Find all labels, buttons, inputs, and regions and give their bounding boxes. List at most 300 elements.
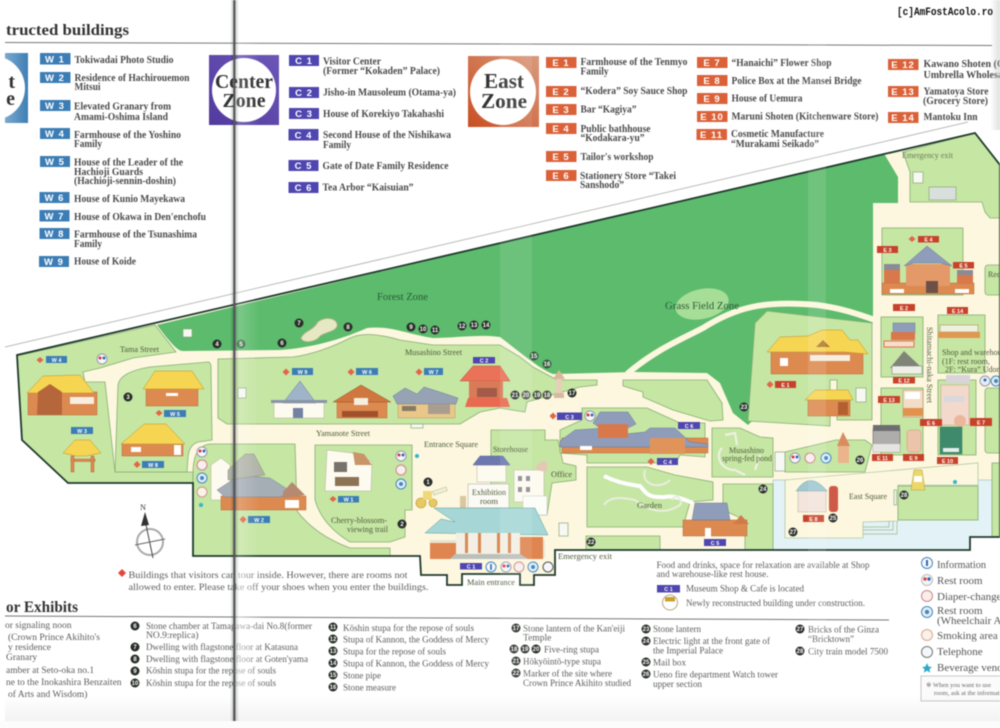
info note box: ※ When you want to use — [926, 682, 991, 689]
block: east lawn — [898, 486, 978, 520]
building: E1 farmhouse — [767, 330, 868, 374]
label Musashino spring-fed pond: Musashino — [729, 446, 764, 455]
E1: Family — [580, 66, 608, 78]
exhibit list column 5: upper section — [653, 680, 702, 690]
E4: E 4 — [552, 124, 570, 135]
building: C2 mausoleum — [460, 366, 510, 407]
W3: Amami-Oshima Island — [74, 112, 168, 123]
note: visit inside buildings: Buildings that visitors can tour inside. However, there are rooms not — [128, 571, 408, 581]
E7: E 7 — [703, 58, 721, 69]
exhibit list column 4: 21 — [513, 659, 520, 665]
block: W5 and W8 — [115, 362, 212, 472]
badge W6: W 6 — [362, 370, 372, 376]
header rule — [5, 42, 992, 46]
C4 — [288, 129, 451, 151]
E8: E 8 — [703, 76, 721, 87]
numbered exhibit markers: 12 — [459, 324, 466, 330]
key: museum shop and cafe: C 1 — [664, 587, 673, 593]
compass: N — [140, 503, 146, 512]
badge W4: W 4 — [52, 358, 62, 364]
exhibit list column 4: Crown Prince Akihito studied — [523, 679, 631, 689]
E11: E 11 — [700, 130, 723, 141]
label Exhibition room: room — [480, 497, 499, 506]
note: visit inside buildings: allowed to enter. Please take off your shoes when you enter the buildings. — [128, 582, 428, 593]
heading: reconstructed buildings: tructed buildings — [6, 22, 129, 39]
E14: Mantoku Inn — [924, 112, 978, 123]
small white structures — [183, 172, 956, 536]
badge E9 — [903, 454, 924, 462]
C1: (Former “Kokaden” Palace) — [323, 66, 440, 77]
exhibit list column 2: 10 — [132, 681, 139, 687]
exhibit: lamp post — [911, 470, 925, 490]
numbered exhibit markers: 4 — [215, 342, 219, 348]
label Cherry-blossom viewing trail: viewing trail — [347, 525, 389, 534]
exhibit list column 3: 15 — [330, 673, 337, 679]
badge E10 — [937, 457, 958, 465]
C5: Gate of Date Family Residence — [322, 161, 449, 172]
W6: House of Kunio Mayekawa — [74, 194, 185, 205]
label Shibamachi-naka Street: Shitamachi-naka Street — [925, 327, 934, 404]
badge W7: W 7 — [429, 370, 438, 376]
badge E6: E 6 — [927, 421, 935, 427]
block: E7 — [938, 380, 976, 455]
badge E13 — [878, 396, 900, 404]
building: police box E8 — [796, 480, 838, 512]
block: Musashino Street — [218, 334, 597, 424]
exhibit list column 5: Ueno fire department Watch tower — [653, 670, 779, 680]
building: W3 granary — [63, 440, 101, 472]
road branch through forest — [627, 304, 875, 374]
exhibit list column 1 — [5, 621, 122, 700]
telephone: Telephone — [937, 646, 983, 658]
C4: Family — [323, 140, 351, 151]
label Garden: Garden — [637, 501, 662, 510]
moat water — [773, 480, 1000, 552]
numbered exhibit markers: 23 — [741, 405, 748, 411]
numbered exhibit markers: 27 — [790, 530, 797, 536]
badge C5: C 5 — [711, 541, 719, 547]
stepping stone feature — [301, 319, 337, 342]
block: garden — [587, 467, 713, 527]
building: W2 residence — [211, 454, 306, 510]
numbered exhibit markers: 5 — [239, 342, 243, 348]
wheelchair rest room: Rest room — [937, 605, 983, 617]
label emergency exit bottom: Emergency exit — [558, 552, 613, 561]
label main entrance: Main entrance — [467, 578, 515, 587]
exhibit list column 5 — [642, 624, 779, 690]
exhibit list column 3: 14 — [330, 661, 337, 667]
C3: C 3 — [295, 109, 313, 120]
E3: E 3 — [552, 105, 570, 116]
key: museum shop and cafe: Museum Shop & Cafe is located — [686, 584, 804, 594]
heading: major exhibits: or Exhibits — [6, 599, 78, 616]
numbered exhibit markers: 20 — [523, 393, 530, 399]
thin boundary line above map — [5, 122, 968, 347]
map badges: east zone — [766, 236, 992, 523]
exhibit list column 6: City train model 7500 — [808, 648, 888, 658]
numbered exhibit markers: 3 — [126, 395, 130, 401]
badge W3 — [71, 427, 93, 435]
W5 — [40, 156, 184, 187]
W6 — [40, 192, 185, 205]
badge C4: C 4 — [663, 460, 673, 466]
building: W4 farmhouse — [27, 375, 97, 415]
block: E2 — [881, 317, 923, 377]
badge C5 — [704, 539, 726, 547]
zone badge: East Zone: Zone — [481, 89, 527, 113]
compass — [135, 503, 165, 558]
badge E3: E 3 — [883, 248, 892, 254]
block: W2 — [193, 444, 390, 556]
E4: Public bathhouse — [580, 124, 651, 135]
badge E4: E 4 — [924, 238, 934, 244]
badge W5: W 5 — [170, 412, 180, 418]
W8: Farmhouse of the Tsunashima — [74, 230, 197, 240]
building: E13 — [903, 390, 923, 417]
block: south east of garden — [723, 484, 773, 550]
zone badge: Center Zone — [209, 55, 279, 125]
W3: W 3 — [45, 101, 65, 112]
badge W1: W 1 — [344, 498, 353, 504]
numbered exhibit markers: 2 — [400, 522, 404, 528]
badge W9: W 9 — [298, 370, 307, 376]
grass field patch — [675, 288, 729, 320]
east square ground — [785, 463, 978, 538]
building: warehouse shop E6 — [941, 375, 970, 427]
badge W2 — [240, 516, 270, 524]
badge E5 — [953, 262, 974, 270]
food and drink note: and warehouse-like rest house. — [656, 570, 768, 580]
exhibit list column 5: 25 — [643, 660, 650, 666]
exhibit list column 3: 11 — [330, 625, 337, 631]
C4: C 4 — [295, 130, 312, 142]
wheelchair rest room — [922, 605, 1000, 627]
badge C3: C 3 — [565, 415, 574, 421]
exhibit list column 5: 24 — [643, 639, 650, 645]
exhibit list column 4 — [510, 624, 631, 689]
building: E4 bathhouse with E3 and E5 — [882, 246, 974, 294]
building: E12 — [890, 351, 922, 374]
exhibit list column 1: of Arts and Wisdom) — [8, 689, 87, 700]
E10: E 10 — [700, 112, 724, 123]
zone badge: East Zone — [468, 56, 539, 127]
block: W1 — [315, 445, 412, 542]
badge E1: E 1 — [781, 383, 790, 389]
exhibit list column 4: 17 — [513, 626, 520, 632]
W5: Hachioji Guards — [74, 167, 143, 178]
badge E1 — [766, 381, 796, 389]
W4 — [40, 128, 181, 150]
E5: E 5 — [552, 152, 570, 163]
building: exhibition room — [460, 484, 509, 508]
exhibit list column 4: Five-ring stupa — [544, 646, 600, 656]
E13: Yamatoya Store — [924, 86, 989, 98]
exhibit list column 1: y residence — [8, 643, 51, 653]
exhibit list column 3: 12 — [330, 637, 337, 643]
building: office — [514, 461, 547, 515]
label Entrance Square: Entrance Square — [424, 440, 478, 449]
label Tama Street: Tama Street — [120, 345, 160, 354]
building: E2 — [884, 323, 915, 347]
exhibit list column 3: Stupa of Kannon, the Goddess of Mercy — [343, 634, 489, 646]
building: W8 farmhouse — [121, 424, 185, 456]
exhibit list column 6: 28 — [797, 649, 804, 655]
block: storehouse and office — [491, 430, 576, 515]
label Exhibition room — [472, 488, 506, 506]
E9 — [697, 93, 802, 105]
zone badge: West Zone: t — [8, 71, 15, 93]
E6: Sanshodo” — [580, 180, 624, 191]
facilities legend — [922, 558, 1000, 674]
stair lines — [863, 521, 897, 534]
badge E12: E 12 — [898, 378, 910, 384]
exhibit list column 2: 8 — [133, 657, 137, 663]
building: E10 — [940, 427, 962, 454]
legend: east zone buildings — [546, 57, 1000, 191]
badge C1 — [460, 563, 482, 570]
information: Information — [937, 559, 986, 571]
exhibit list column 3 — [328, 622, 489, 694]
numbered exhibit markers: 22 — [588, 540, 595, 546]
exhibit list column 6 — [796, 624, 888, 658]
W2: Mitsui — [74, 82, 101, 93]
block: E13 and E9 — [881, 388, 923, 455]
building: E14 — [938, 325, 980, 338]
block: emergency exit lawn — [903, 133, 1000, 218]
W7 — [40, 210, 206, 223]
C1: C 1 — [295, 56, 313, 67]
food and drink note — [656, 560, 870, 580]
zone badge: Center Zone: Zone — [222, 90, 266, 112]
legend: center zone buildings — [288, 55, 456, 194]
badge E14: E 14 — [952, 309, 964, 315]
W3: Elevated Granary from — [74, 102, 172, 112]
exhibit: steam roller — [416, 487, 447, 508]
W8: Family — [74, 239, 102, 250]
exhibit list column 4: 20 — [533, 647, 540, 653]
exhibit list column 5: Stone lantern — [653, 625, 701, 635]
garden blocks — [17, 133, 1000, 556]
numbered exhibit markers: 26 — [857, 458, 864, 464]
garden pond — [604, 476, 693, 503]
W4: Farmhouse of the Yoshino — [74, 130, 181, 141]
exhibit list column 3: 16 — [330, 685, 337, 691]
E9: E 9 — [703, 94, 721, 105]
badge E7 — [970, 418, 992, 426]
badge E12 — [893, 377, 915, 384]
exhibit list column 1: (Crown Prince Akihito's — [8, 632, 100, 643]
building: W5 house — [143, 371, 204, 406]
W9 — [39, 256, 137, 268]
W6: W 6 — [45, 193, 64, 204]
label Yamanote Street: Yamanote Street — [316, 429, 371, 438]
exhibit list column 2: Stone chamber at Tamagawa-dai No.8(former — [146, 621, 313, 632]
numbered exhibit markers: 10 — [420, 327, 427, 333]
label shop and warehouse: (1F: rest room, — [942, 357, 990, 366]
badge E14 — [947, 307, 968, 315]
numbered exhibit markers: 7 — [297, 321, 301, 327]
badge E2: E 2 — [900, 306, 908, 312]
W2 — [40, 72, 190, 93]
exhibit list column 5: Mail box — [653, 658, 686, 668]
E13: E 13 — [891, 87, 915, 98]
W8: W 8 — [45, 229, 64, 240]
building: W9 house — [271, 381, 327, 418]
exhibit list column 6: 27 — [797, 627, 804, 633]
C2: Jisho-in Mausoleum (Otama-ya) — [323, 88, 456, 98]
E5 — [546, 151, 654, 163]
badge E6 — [920, 419, 942, 427]
exhibit list column 2: Kōshin stupa for the repose of souls — [146, 666, 276, 676]
badge W5 — [156, 410, 186, 418]
exhibit list column 4: 22 — [513, 671, 520, 677]
exhibit list column 3: Kōshin stupa for the repose of souls — [343, 623, 474, 634]
exhibit list column 1: ne to the Inokashira Benzaiten — [6, 678, 122, 688]
exhibit list column 4: 19 — [522, 647, 529, 653]
badge E4 — [908, 236, 939, 244]
zone badge: West Zone: e — [6, 88, 15, 110]
label Storehouse: Storehouse — [493, 445, 528, 454]
stone lantern — [553, 370, 565, 398]
label Musashino Street: Musashino Street — [405, 348, 463, 357]
badge C2: C 2 — [480, 358, 488, 364]
building: exhibition storehouse — [473, 456, 510, 482]
key: reconstruction icon — [662, 595, 865, 610]
note: visit inside buildings — [118, 569, 428, 593]
map badges: center zone — [460, 357, 726, 570]
spring pond paths — [719, 433, 760, 475]
building: W1 photo studio — [325, 450, 372, 491]
badge W7 — [416, 368, 443, 376]
block: E4 — [882, 228, 963, 295]
E14 — [888, 112, 978, 124]
E2: “Kodera” Soy Sauce Shop — [580, 86, 688, 97]
food and drink note: Food and drinks, space for relaxation are available at Shop — [656, 560, 870, 571]
label shop and warehouse: 2F: “Kura” Udon — [945, 365, 1000, 374]
exhibit list column 1: Granary — [6, 653, 37, 663]
badge W9 — [282, 368, 313, 376]
C2: C 2 — [295, 88, 313, 99]
E3 — [546, 104, 636, 116]
badge W3: W 3 — [77, 429, 87, 435]
E2 — [546, 86, 688, 98]
numbered exhibit markers: 28 — [901, 493, 908, 499]
rest room: Rest room — [937, 575, 983, 587]
block: south of C5 west — [586, 536, 660, 550]
exhibit list column 3: Stone measure — [343, 684, 396, 694]
badge C2 — [473, 357, 495, 364]
E13 — [888, 86, 989, 107]
exhibit list column 3: Stupa of Kannon, the Goddess of Mercy — [343, 658, 489, 670]
building: C4 Nishikawa house — [560, 412, 708, 454]
numbered exhibit markers: 15 — [531, 354, 538, 360]
W1: Tokiwadai Photo Studio — [74, 55, 174, 66]
block: recreation — [985, 265, 1000, 295]
numbered exhibit markers: 1 — [426, 480, 430, 486]
block: tower lawn — [785, 440, 872, 472]
exhibit list column 3: Stupa for the repose of souls — [343, 646, 446, 658]
W5: House of the Leader of the — [74, 158, 184, 168]
badge W4 — [36, 356, 67, 364]
label Musashino spring-fed pond — [722, 446, 772, 463]
badge W6 — [348, 368, 378, 376]
exhibit list column 6: Bricks of the Ginza — [808, 624, 880, 636]
badge E8 — [803, 515, 824, 523]
label Cherry-blossom viewing trail — [331, 516, 389, 534]
map badges: west zone — [36, 356, 443, 524]
E9: House of Uemura — [732, 94, 802, 104]
E13: (Grocery Store) — [923, 96, 988, 107]
E11: Cosmetic Manufacture — [731, 129, 825, 140]
W9: W 9 — [44, 257, 64, 268]
badge E11 — [872, 454, 893, 462]
badge C6 — [678, 422, 700, 430]
building: E1 outbuilding — [805, 390, 853, 416]
badge E13: E 13 — [883, 398, 895, 404]
numbered exhibit markers: 17 — [569, 391, 576, 397]
W9: House of Koide — [74, 256, 137, 268]
numbered exhibit markers: 14 — [483, 323, 490, 329]
info note box — [921, 676, 1000, 701]
exhibit list column 6: “Bricktown” — [808, 635, 854, 645]
exhibit list column 3: Stone pipe — [343, 672, 381, 682]
exhibit list column 1: or signaling noon — [5, 621, 72, 631]
W3 — [40, 100, 172, 123]
C3: House of Korekiyo Takahashi — [323, 109, 444, 120]
E12 — [888, 59, 1000, 81]
badge E10: E 10 — [942, 459, 953, 465]
block: Tama Street west — [17, 325, 193, 483]
E12: E 12 — [891, 60, 915, 71]
label Grass Field Zone: Grass Field Zone — [665, 301, 740, 312]
badge W8 — [134, 461, 164, 469]
label Cherry-blossom viewing trail: Cherry-blossom- — [331, 516, 387, 525]
label Exhibition room: Exhibition — [472, 488, 506, 497]
building: fire watch tower — [837, 432, 850, 463]
exhibit list column 4: Hōkyōintō-type stupa — [523, 658, 602, 668]
exhibit list column 5: 26 — [643, 672, 650, 678]
badge E3 — [877, 246, 898, 254]
numbered exhibit markers: 11 — [432, 328, 439, 334]
badge E5: E 5 — [959, 264, 968, 270]
W8 — [40, 228, 197, 250]
E4: “Kodakara-yu” — [580, 133, 644, 144]
badge C1: C 1 — [467, 564, 475, 570]
map outline — [17, 133, 1000, 585]
badge W1 — [330, 496, 359, 504]
C6: Tea Arbor “Kaisuian” — [322, 182, 414, 194]
numbered exhibit markers: 6 — [280, 341, 284, 347]
C1 — [289, 55, 440, 77]
exhibit list column 4: Temple — [523, 634, 551, 644]
building: C5 gate — [683, 503, 749, 537]
badge C6: C 6 — [685, 424, 693, 430]
badge C4 — [648, 458, 678, 466]
numbered exhibit markers: 18 — [544, 393, 551, 399]
block: E14 — [938, 315, 985, 373]
W7: House of Okawa in Den'enchofu — [74, 212, 206, 223]
legend: west zone buildings — [39, 53, 206, 268]
badge E2 — [893, 304, 915, 312]
E6: E 6 — [552, 171, 570, 182]
block: north of C6 — [623, 380, 723, 421]
label Musashino spring-fed pond: spring-fed pond — [722, 454, 772, 463]
badge W2: W 2 — [254, 518, 264, 524]
C3 — [289, 108, 444, 120]
E10: Maruni Shoten (Kitchenware Store) — [732, 112, 878, 122]
exhibit list column 2: Kōshin stupa for the repose of souls — [146, 678, 276, 689]
W1 — [40, 53, 174, 66]
